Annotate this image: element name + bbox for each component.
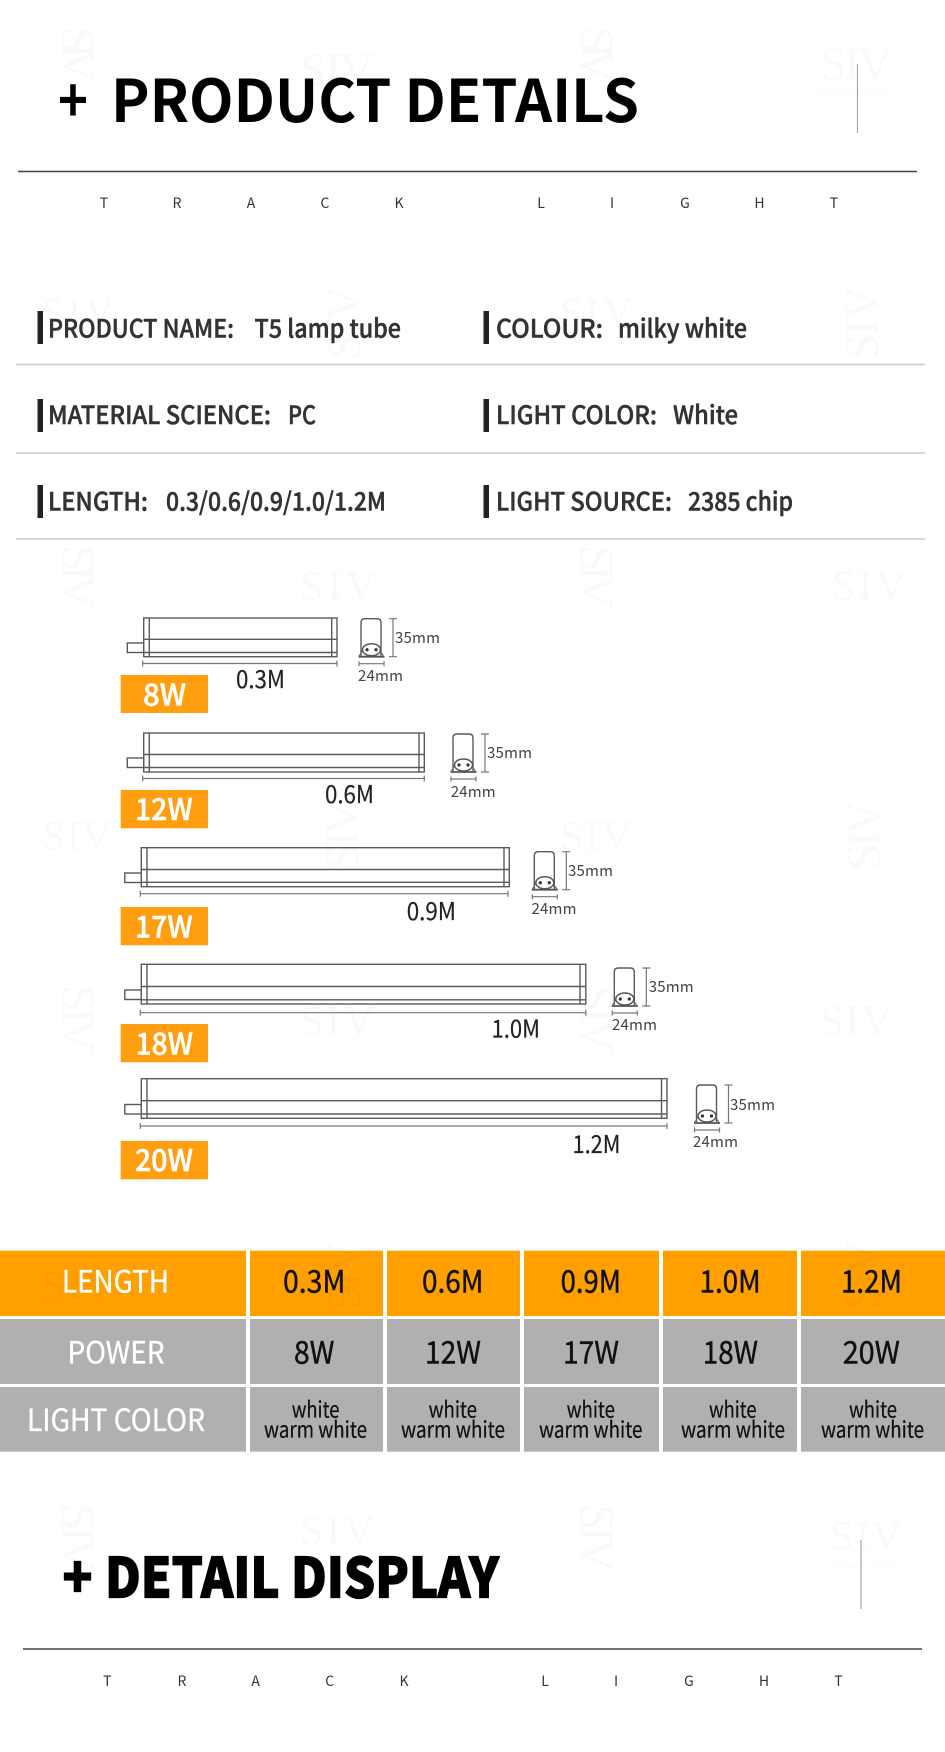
subtitle: track light: L bbox=[541, 1671, 549, 1691]
diagram: 20W 1.2M lamp bbox=[121, 1079, 775, 1180]
brand watermarks: SIV bbox=[836, 286, 889, 360]
table: length, power and light color bbox=[0, 1251, 945, 1452]
subtitle: track light: L bbox=[537, 193, 545, 213]
brand watermarks: SIV bbox=[300, 999, 374, 1045]
power badge: 17W bbox=[135, 902, 193, 946]
brand watermarks: SIV bbox=[560, 290, 632, 335]
subtitle: track light: G bbox=[684, 1671, 694, 1691]
table row: light color: LIGHT COLOR bbox=[27, 1395, 205, 1440]
length label: 1.2M bbox=[572, 1126, 620, 1161]
lamp cross-section with dimensions: 24mm bbox=[451, 781, 496, 802]
spec: product name bbox=[38, 310, 401, 346]
lamp cross-section with dimensions bbox=[450, 734, 532, 802]
diagram: 17W 0.9M lamp bbox=[121, 848, 613, 946]
length label: 0.3M bbox=[236, 661, 285, 696]
diagram: 18W 1.0M lamp bbox=[121, 964, 694, 1063]
table row: length: 1.2M bbox=[841, 1256, 902, 1301]
lamp tube drawing bbox=[127, 733, 424, 782]
table row: length bbox=[0, 1251, 945, 1316]
table row: light color: warm white bbox=[681, 1413, 785, 1445]
subtitle: track light bbox=[100, 193, 838, 213]
heading: detail display: DETAIL DISPLAY bbox=[105, 1534, 499, 1614]
table row: light color: white bbox=[429, 1393, 477, 1425]
subtitle: track light: K bbox=[399, 1671, 409, 1691]
spec: light source: LIGHT SOURCE: bbox=[496, 482, 672, 518]
brand watermarks: SIV bbox=[560, 1264, 632, 1310]
spec: length bbox=[38, 482, 386, 518]
table row: light color: white bbox=[709, 1393, 756, 1425]
subtitle: track light: I bbox=[614, 1671, 618, 1691]
subtitle: track light: T bbox=[834, 1671, 843, 1691]
spec: light source bbox=[484, 482, 793, 518]
brand watermarks: SIV bbox=[820, 38, 892, 91]
table row: length: 0.9M bbox=[561, 1256, 621, 1301]
brand watermarks: SIV bbox=[42, 814, 112, 860]
spec: material science: MATERIAL SCIENCE: bbox=[48, 396, 271, 432]
spec: product name: T5 lamp tube bbox=[254, 310, 401, 346]
lamp cross-section with dimensions: 35mm bbox=[730, 1094, 775, 1115]
power badge: 20W bbox=[135, 1136, 193, 1180]
spec: colour: COLOUR: bbox=[496, 310, 603, 346]
subtitle: track light: H bbox=[759, 1671, 769, 1691]
lamp cross-section with dimensions bbox=[532, 852, 613, 919]
lamp tube drawing bbox=[125, 964, 586, 1016]
power badge bbox=[121, 785, 208, 829]
lamp tube drawing bbox=[125, 848, 509, 897]
table row: power bbox=[0, 1319, 945, 1384]
subtitle: track light: A bbox=[247, 193, 256, 213]
table row: power: POWER bbox=[68, 1327, 164, 1372]
power badge: 12W bbox=[135, 785, 193, 829]
brand watermarks: SIV bbox=[316, 800, 369, 870]
table row: light color: warm white bbox=[401, 1413, 505, 1445]
table row: length: 0.3M bbox=[283, 1256, 345, 1301]
brand watermarks: SIV bbox=[51, 27, 104, 83]
lamp cross-section with dimensions: 35mm bbox=[649, 976, 694, 997]
section header: product details bbox=[18, 54, 917, 213]
brand watermarks: SIV bbox=[42, 1264, 114, 1310]
power badge bbox=[121, 1136, 208, 1180]
subtitle: track light: T bbox=[100, 193, 108, 213]
spec: light color: White bbox=[673, 396, 738, 432]
heading: product details: + bbox=[58, 54, 88, 139]
brand watermarks: HOME DECO bbox=[820, 85, 892, 97]
table row: light color: warm white bbox=[821, 1413, 924, 1445]
spec: light color: LIGHT COLOR: bbox=[496, 396, 657, 432]
brand watermarks: SIV bbox=[300, 564, 376, 610]
lamp cross-section with dimensions bbox=[693, 1085, 775, 1152]
table row: length: 0.6M bbox=[422, 1256, 483, 1301]
table row: power: 8W bbox=[294, 1327, 334, 1372]
table row: power: 12W bbox=[425, 1327, 481, 1372]
power badge: 18W bbox=[136, 1019, 193, 1063]
subtitle: track light: G bbox=[680, 193, 690, 213]
subtitle: track light: C bbox=[321, 193, 330, 213]
brand watermarks: SIV bbox=[318, 286, 371, 360]
brand watermarks: SIV bbox=[570, 27, 623, 83]
spec: light source: 2385 chip bbox=[688, 482, 793, 518]
power badge bbox=[121, 902, 208, 946]
length label: 0.9M bbox=[407, 893, 456, 928]
brand watermarks: SIV bbox=[318, 1240, 371, 1310]
power badge bbox=[121, 1019, 208, 1063]
brand watermarks: SIV bbox=[51, 545, 104, 609]
subtitle: track light: C bbox=[325, 1671, 334, 1691]
table row: light color: white bbox=[849, 1393, 897, 1425]
lamp cross-section with dimensions: 35mm bbox=[487, 742, 532, 763]
lamp cross-section with dimensions: 24mm bbox=[358, 665, 403, 686]
brand watermarks: SIV bbox=[570, 545, 623, 609]
lamp tube drawing bbox=[127, 618, 337, 666]
panel: lamp size diagrams bbox=[121, 618, 775, 1180]
brand watermarks: SIV bbox=[832, 564, 906, 610]
table row: power: 18W bbox=[703, 1327, 758, 1372]
length label: 0.6M bbox=[325, 776, 374, 811]
length label: 1.0M bbox=[492, 1010, 540, 1045]
spec: light color bbox=[484, 396, 738, 432]
table row: light color: white bbox=[292, 1393, 339, 1425]
section header: detail display bbox=[23, 1534, 922, 1691]
table row: length: 1.0M bbox=[700, 1256, 761, 1301]
spec: product name: PRODUCT NAME: bbox=[48, 310, 234, 346]
spec: length: LENGTH: bbox=[48, 482, 148, 518]
brand watermarks: SIV bbox=[820, 999, 892, 1045]
brand watermarks: SIV bbox=[300, 1509, 374, 1555]
table row: power: 17W bbox=[563, 1327, 619, 1372]
lamp cross-section with dimensions: 24mm bbox=[532, 898, 576, 919]
table row: length: LENGTH bbox=[62, 1256, 169, 1301]
brand watermarks: SIV bbox=[570, 985, 623, 1053]
lamp cross-section with dimensions bbox=[358, 619, 440, 686]
table row: light color bbox=[0, 1387, 945, 1452]
subtitle: track light: R bbox=[173, 193, 182, 213]
brand watermarks: SIV bbox=[51, 985, 104, 1053]
table row: light color: warm white bbox=[539, 1413, 642, 1445]
brand watermarks: SIV bbox=[560, 814, 632, 860]
spec: colour bbox=[484, 310, 747, 346]
subtitle: track light: T bbox=[103, 1671, 111, 1691]
brand watermarks: SIV bbox=[300, 44, 374, 97]
subtitle: track light bbox=[103, 1671, 843, 1691]
brand watermarks: HOME DECO bbox=[830, 1561, 902, 1573]
panel: specification list bbox=[16, 310, 925, 539]
diagram: 12W 0.6M lamp bbox=[121, 733, 532, 829]
lamp cross-section with dimensions: 24mm bbox=[612, 1014, 657, 1035]
power badge bbox=[121, 670, 208, 714]
brand watermarks: SIV bbox=[570, 1504, 623, 1572]
subtitle: track light: A bbox=[251, 1671, 260, 1691]
brand watermarks: SIV bbox=[42, 290, 114, 335]
subtitle: track light: H bbox=[754, 193, 765, 213]
heading: detail display: + bbox=[62, 1534, 92, 1614]
table row: light color: white bbox=[567, 1393, 615, 1425]
subtitle: track light: T bbox=[830, 193, 838, 213]
brand watermarks: SIV bbox=[838, 800, 891, 870]
power badge: 8W bbox=[143, 670, 186, 714]
heading: product details: PRODUCT DETAILS bbox=[111, 54, 639, 139]
lamp cross-section with dimensions: 35mm bbox=[395, 627, 440, 648]
subtitle: track light: R bbox=[178, 1671, 187, 1691]
subtitle: track light: K bbox=[394, 193, 404, 213]
spec: length: 0.3/0.6/0.9/1.0/1.2M bbox=[166, 482, 386, 518]
lamp cross-section with dimensions: 35mm bbox=[568, 860, 613, 881]
spec: material science: PC bbox=[288, 396, 316, 432]
diagram: 8W 0.3M lamp bbox=[121, 618, 440, 714]
brand watermarks: SIV bbox=[836, 1240, 889, 1310]
lamp tube drawing bbox=[125, 1079, 667, 1129]
lamp cross-section with dimensions bbox=[612, 968, 694, 1035]
brand watermarks: SIV bbox=[830, 1514, 902, 1560]
subtitle: track light: I bbox=[610, 193, 614, 213]
table row: light color: warm white bbox=[264, 1413, 367, 1445]
spec: colour: milky white bbox=[618, 310, 747, 346]
lamp cross-section with dimensions: 24mm bbox=[693, 1131, 738, 1152]
table row: power: 20W bbox=[843, 1327, 900, 1372]
brand watermarks: SIV bbox=[51, 1504, 104, 1572]
